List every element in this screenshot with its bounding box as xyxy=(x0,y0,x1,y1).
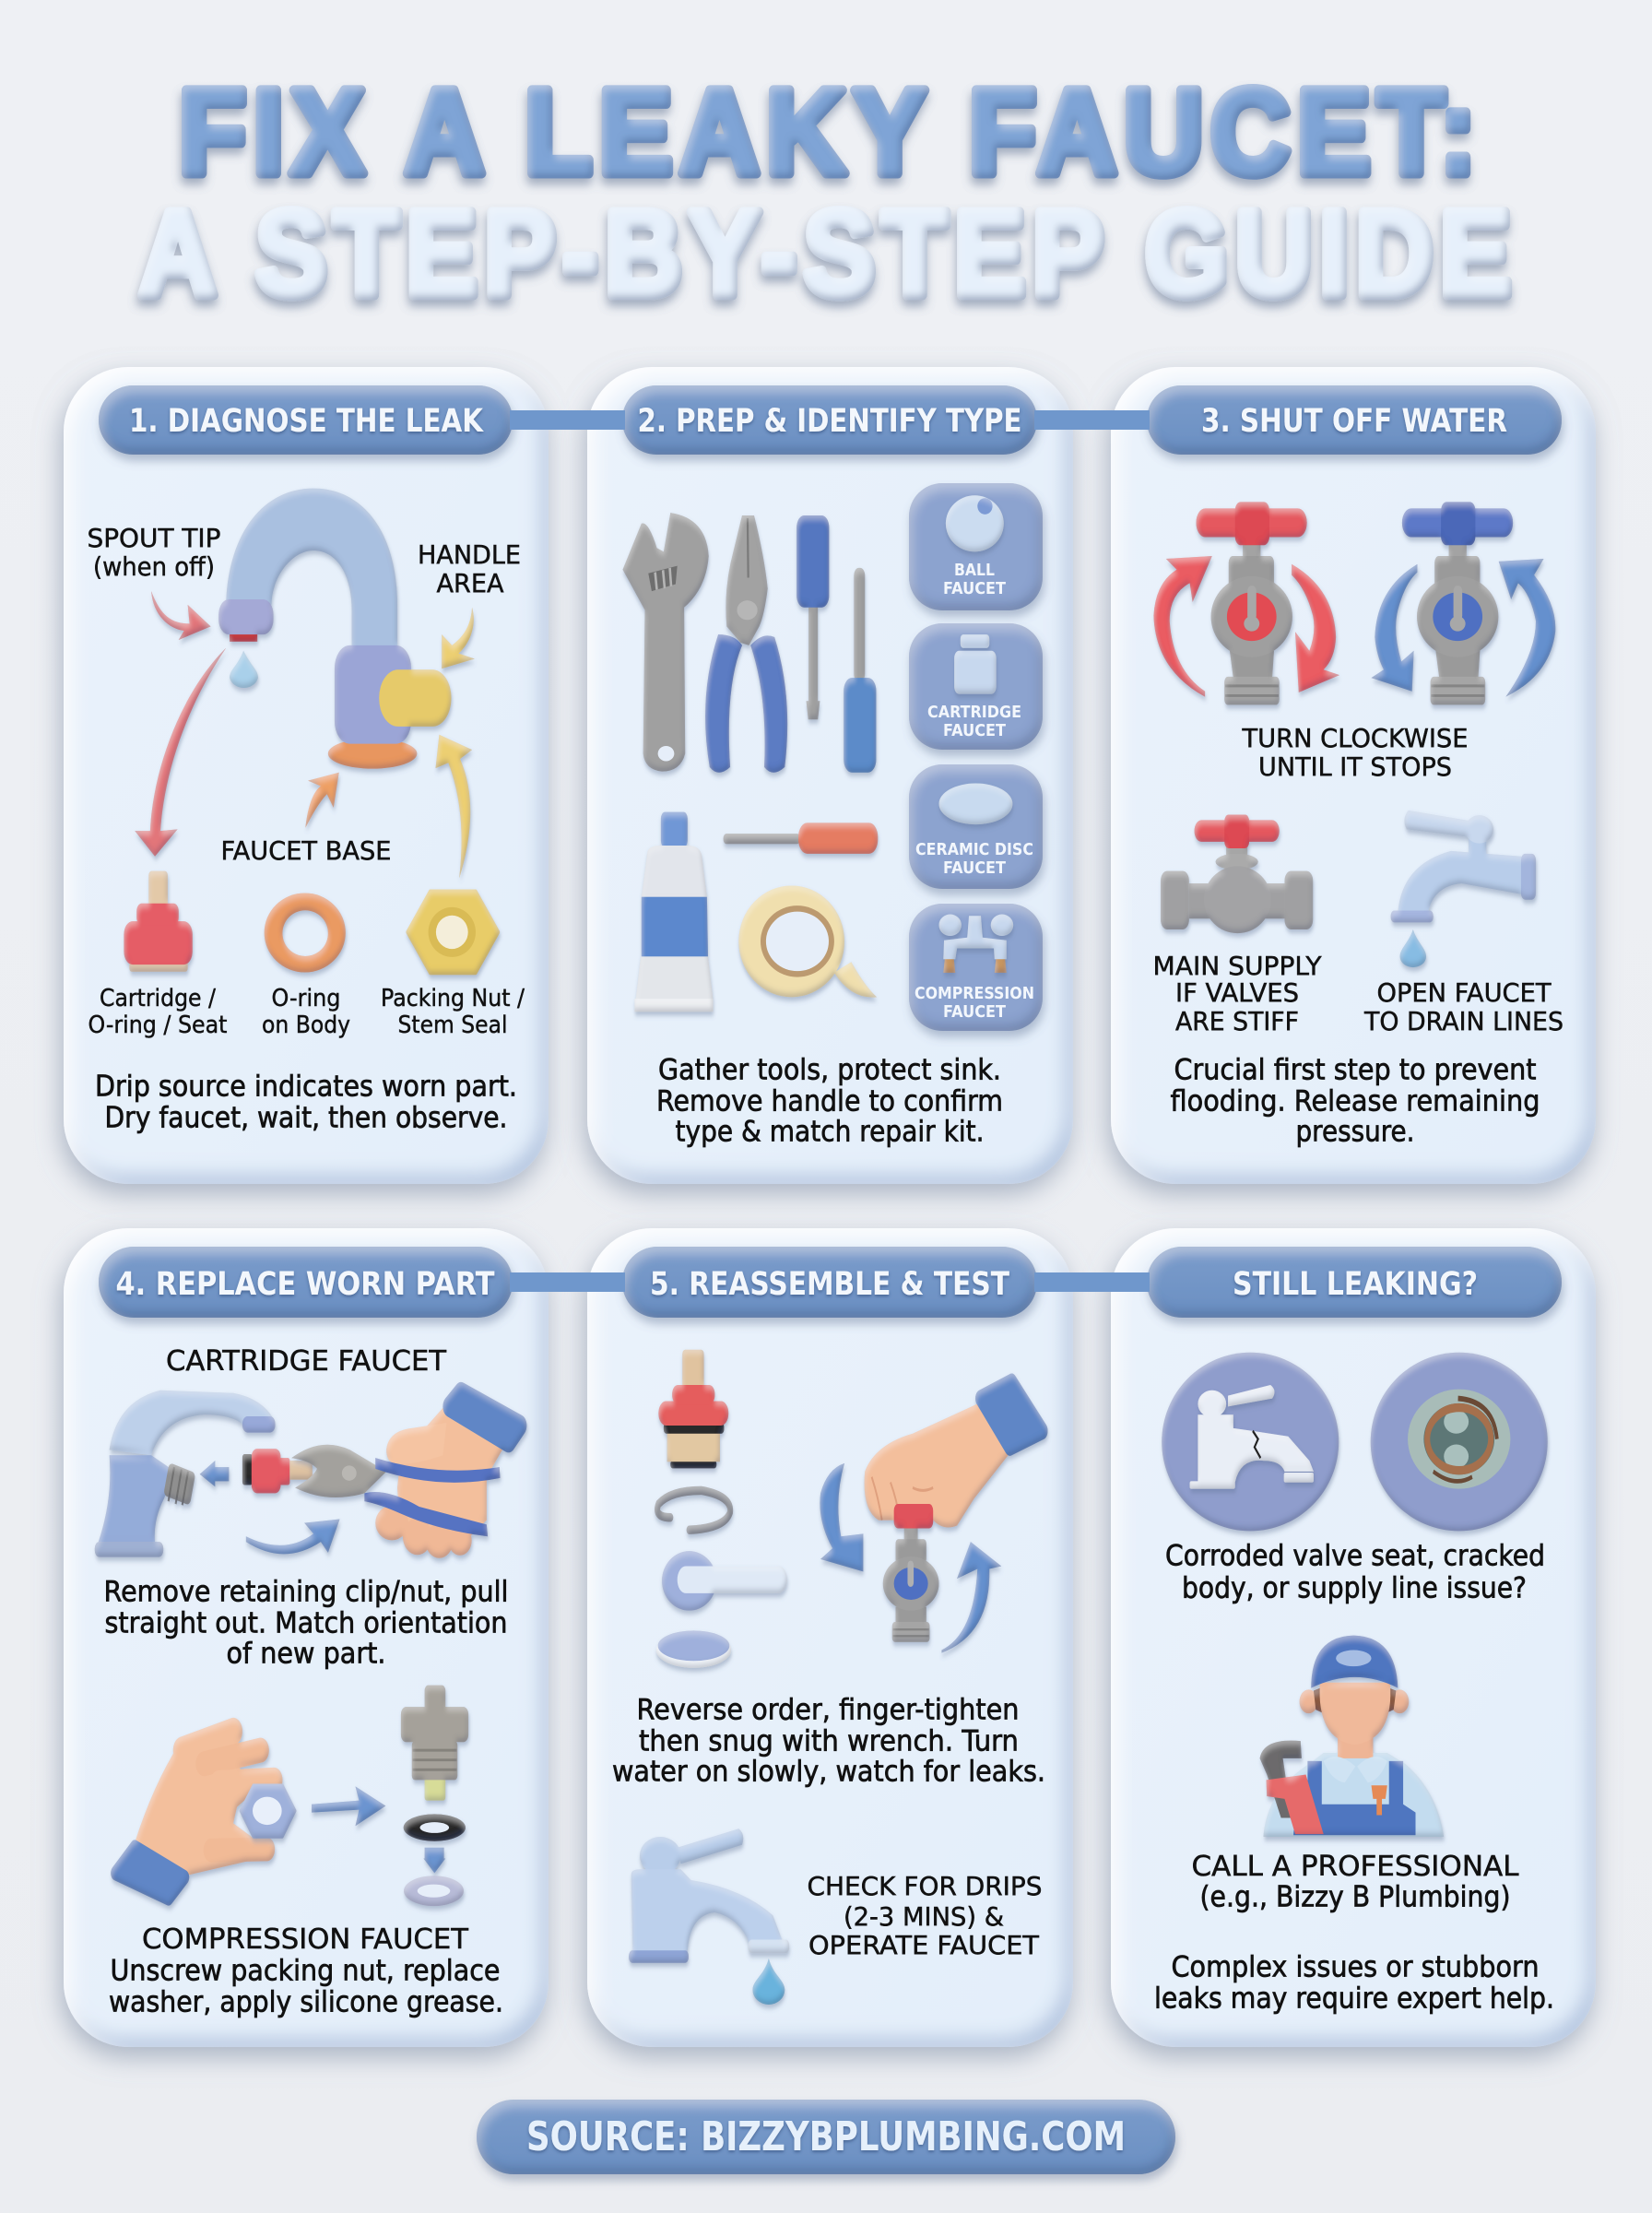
header pill: 2. PREP & IDENTIFY TYPE xyxy=(638,403,1021,440)
faucet type badge: ball xyxy=(909,483,1043,610)
icon: hand with pliers xyxy=(291,1393,519,1558)
drip check caption: OPERATE FAUCET xyxy=(808,1930,1040,1960)
arrows pointing at leak points xyxy=(135,591,475,878)
description: compression xyxy=(109,1923,503,2019)
drip check caption xyxy=(808,1871,1042,1960)
header pill: 5. REASSEMBLE & TEST xyxy=(650,1266,1009,1303)
panel: step 1 diagnose the leak xyxy=(64,367,549,1184)
description xyxy=(612,1693,1045,1789)
icon: hand turning valve with arrows xyxy=(820,1382,1043,1652)
description: cartridge xyxy=(103,1575,509,1671)
faucet type badge: compression: FAUCET xyxy=(943,1002,1007,1022)
subheading: cartridge faucet: CARTRIDGE FAUCET xyxy=(166,1345,447,1378)
drip check caption: CHECK FOR DRIPS xyxy=(808,1871,1042,1901)
icon: arrow and stem parts xyxy=(312,1686,468,1906)
header pill: 4. REPLACE WORN PART xyxy=(116,1266,495,1303)
header pill xyxy=(1147,385,1562,455)
icon: grease tube xyxy=(634,812,714,1012)
source footer pill: SOURCE: BIZZYBPLUMBING.COM xyxy=(526,2113,1126,2160)
faucet type badge: cartridge xyxy=(909,623,1043,750)
part captions: O-ring xyxy=(271,985,341,1012)
faucet type badge: cartridge: FAUCET xyxy=(943,721,1007,740)
description: compression: COMPRESSION FAUCET xyxy=(142,1923,469,1956)
panel: step 2 prep and identify type xyxy=(587,367,1073,1184)
faucet type badge: ceramic disc xyxy=(909,764,1043,889)
description: pressure. xyxy=(1296,1116,1414,1149)
description: type & match repair kit. xyxy=(675,1116,985,1149)
header pill xyxy=(622,385,1037,455)
part captions: on Body xyxy=(262,1012,350,1039)
icon: ceramic disc xyxy=(656,1630,731,1668)
description: Dry faucet, wait, then observe. xyxy=(105,1101,507,1134)
icon: main supply valve xyxy=(1161,815,1313,933)
icon: cracked faucet circle xyxy=(1162,1353,1339,1531)
description: then snug with wrench. Turn xyxy=(639,1724,1019,1757)
labels on the faucet xyxy=(87,523,521,866)
icon: tape roll xyxy=(738,885,877,998)
part captions: Cartridge / xyxy=(100,985,216,1012)
source footer pill xyxy=(477,2100,1175,2174)
description: expert help xyxy=(1154,1951,1554,2016)
title line 2: A STEP-BY-STEP GUIDE xyxy=(139,185,1518,321)
panel: still leaking xyxy=(1111,1228,1596,2047)
title line 1: FIX A LEAKY FAUCET: xyxy=(179,64,1483,199)
card background xyxy=(587,367,1073,1184)
icon: pliers xyxy=(705,515,787,773)
description: causes: body, or supply line issue? xyxy=(1182,1571,1527,1604)
icon: corroded valve seat circle xyxy=(1371,1353,1548,1531)
card background xyxy=(587,1228,1073,2047)
header pill xyxy=(622,1247,1037,1318)
call a professional: (e.g., Bizzy B Plumbing) xyxy=(1200,1881,1510,1914)
connector: step 5 to still leaking xyxy=(1034,1272,1150,1292)
connector: step 4 to step 5 xyxy=(510,1272,625,1292)
labels on the faucet: AREA xyxy=(437,568,503,598)
icon: plumber xyxy=(1260,1636,1444,1837)
drip check caption: (2-3 MINS) & xyxy=(844,1901,1004,1932)
valve caption: TURN CLOCKWISE xyxy=(1242,723,1468,753)
icon: cold shutoff valve with arrows xyxy=(1372,502,1555,704)
description: cartridge: Remove retaining clip/nut, pull xyxy=(103,1575,509,1608)
description xyxy=(95,1070,517,1134)
faucet type badge: ball: FAUCET xyxy=(943,579,1007,598)
faucet type badge: ceramic disc: CERAMIC DISC xyxy=(915,840,1033,859)
card background xyxy=(1111,1228,1596,2047)
captions: ARE STIFF xyxy=(1175,1006,1299,1036)
icon: cartridge stack xyxy=(658,1350,728,1468)
icon: retaining clip xyxy=(657,1490,730,1530)
header pill xyxy=(99,1247,513,1318)
description: Drip source indicates worn part. xyxy=(95,1070,517,1103)
description: Gather tools, protect sink. xyxy=(658,1053,1001,1086)
header pill: STILL LEAKING? xyxy=(1233,1266,1478,1303)
connector: step 1 to step 2 xyxy=(510,410,625,430)
card background xyxy=(1111,367,1596,1184)
header pill: 3. SHUT OFF WATER xyxy=(1201,403,1507,440)
part captions: Packing Nut / xyxy=(381,985,525,1012)
description: cartridge: of new part. xyxy=(227,1638,385,1671)
icon: faucet with drip xyxy=(629,1828,789,2005)
part captions xyxy=(88,985,525,1039)
faucet type badge: compression: COMPRESSION xyxy=(914,984,1034,1003)
labels on the faucet: FAUCET BASE xyxy=(221,835,391,866)
faucet type badge: ceramic disc: FAUCET xyxy=(943,858,1007,878)
labels on the faucet: (when off) xyxy=(93,551,215,582)
part captions: Stem Seal xyxy=(398,1012,507,1039)
description: compression: Unscrew packing nut, replace xyxy=(111,1955,500,1988)
description xyxy=(1171,1053,1540,1149)
header pill: 1. DIAGNOSE THE LEAK xyxy=(129,403,485,440)
header pill xyxy=(99,385,513,455)
icon: open faucet with drop xyxy=(1391,811,1536,967)
captions: IF VALVES xyxy=(1175,977,1299,1008)
description: compression: washer, apply silicone grease. xyxy=(109,1986,503,2019)
description: causes xyxy=(1165,1540,1545,1604)
captions: TO DRAIN LINES xyxy=(1363,1006,1564,1036)
description: expert help: leaks may require expert help. xyxy=(1154,1982,1554,2016)
icon: packing nut xyxy=(407,892,499,973)
faucet type badge: cartridge: CARTRIDGE xyxy=(927,703,1021,722)
description: Remove handle to confirm xyxy=(656,1084,1003,1118)
description: expert help: Complex issues or stubborn xyxy=(1171,1951,1540,1984)
captions xyxy=(1152,951,1564,1036)
header pill xyxy=(1147,1247,1562,1318)
description: Reverse order, finger-tighten xyxy=(636,1693,1020,1726)
faucet type badge: compression xyxy=(909,904,1043,1031)
icon: o-ring xyxy=(265,893,346,973)
captions: OPEN FAUCET xyxy=(1377,977,1552,1008)
card background xyxy=(64,367,549,1184)
description: causes: Corroded valve seat, cracked xyxy=(1165,1540,1545,1573)
description xyxy=(656,1053,1003,1149)
panel: step 4 replace worn part xyxy=(64,1228,549,2047)
icon: screwdrivers xyxy=(724,515,878,854)
part captions: O-ring / Seat xyxy=(88,1012,227,1039)
card background xyxy=(64,1228,549,2047)
description: cartridge: straight out. Match orientation xyxy=(105,1606,507,1639)
panel: step 3 shut off water xyxy=(1111,367,1596,1184)
call a professional xyxy=(1191,1851,1519,1914)
description: flooding. Release remaining xyxy=(1171,1084,1540,1118)
connector: step 2 to step 3 xyxy=(1034,410,1150,430)
captions: MAIN SUPPLY xyxy=(1152,951,1322,981)
valve caption: UNTIL IT STOPS xyxy=(1258,751,1452,782)
icon: adjustable wrench xyxy=(623,513,709,772)
faucet type badge: ball: BALL xyxy=(954,561,995,580)
valve caption xyxy=(1242,723,1468,782)
panel: step 5 reassemble and test xyxy=(587,1228,1073,2047)
title xyxy=(139,64,1518,321)
icon: hot shutoff valve with arrows xyxy=(1153,502,1339,704)
labels on the faucet: SPOUT TIP xyxy=(87,523,221,553)
icon: faucet body with cartridge removal xyxy=(95,1391,340,1557)
icon: leaking faucet xyxy=(218,489,452,769)
labels on the faucet: HANDLE xyxy=(418,539,521,570)
icon: hand holding packing nut xyxy=(116,1732,295,1898)
icon: lever handle xyxy=(662,1551,787,1611)
icon: cartridge part xyxy=(124,871,193,972)
call a professional: CALL A PROFESSIONAL xyxy=(1191,1851,1519,1883)
description: water on slowly, watch for leaks. xyxy=(612,1756,1045,1789)
description: Crucial first step to prevent xyxy=(1174,1053,1536,1086)
